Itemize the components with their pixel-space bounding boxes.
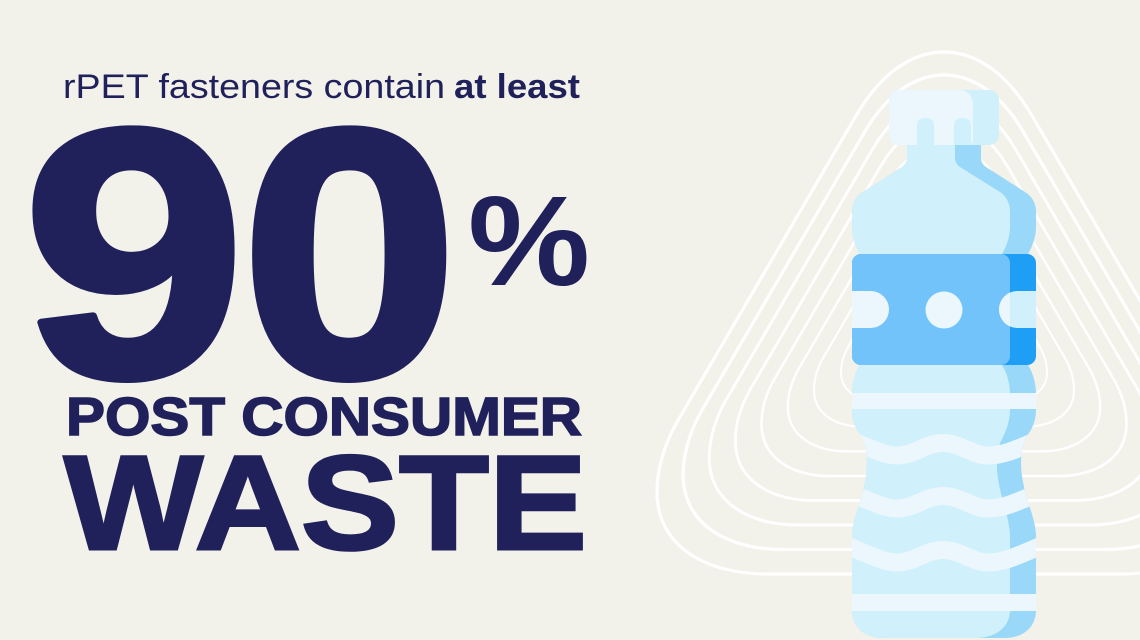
percent sign: % — [468, 170, 590, 313]
heading: waste: WASTE — [64, 429, 587, 578]
intro text: rPET fasteners contain — [63, 68, 445, 106]
stripes and waves — [845, 393, 1043, 611]
big number 90 — [22, 57, 458, 452]
big number 90: 9 — [22, 57, 246, 452]
bottle label band — [852, 254, 1036, 365]
contour rings — [657, 52, 1140, 574]
heading: post consumer: POST CONSUMER — [66, 387, 582, 447]
icon: water bottle — [845, 90, 1043, 638]
intro text: at least — [454, 68, 580, 106]
big number 90: 0 — [240, 57, 458, 452]
bottle body front — [852, 145, 1010, 638]
bottle body shadow — [852, 145, 1036, 638]
bottle cap — [889, 90, 999, 145]
